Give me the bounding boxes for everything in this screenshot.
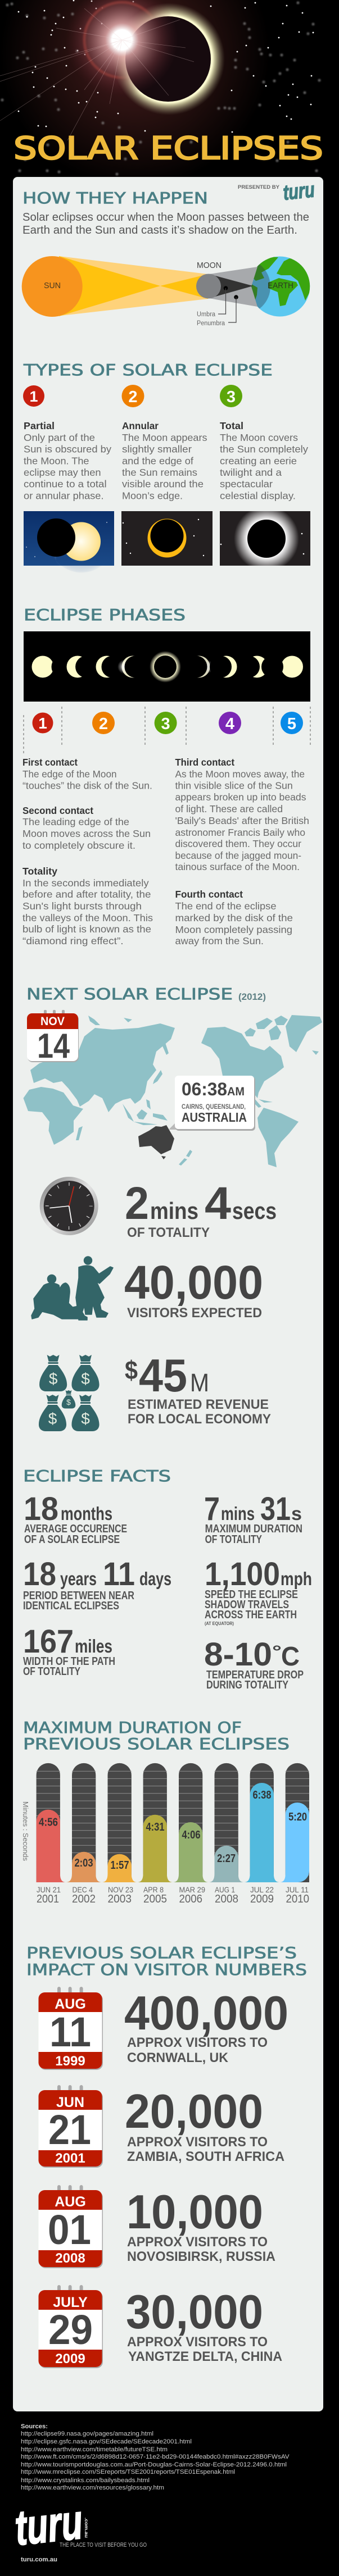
- diagram: sun moon earth: [22, 256, 310, 327]
- heading: next solar eclipse: (2012): [238, 991, 266, 1002]
- fact: 18 years 11 days: IDENTICAL ECLIPSES: [23, 1600, 119, 1612]
- fact: 8-10 degrees: DURING TOTALITY: [206, 1679, 289, 1691]
- umbra label: [197, 286, 228, 318]
- partial description: continue to a total: [24, 479, 107, 490]
- stat: revenue: ESTIMATED REVENUE: [128, 1397, 269, 1412]
- totality: [22, 866, 153, 946]
- fact: 8-10 degrees: [204, 1636, 304, 1691]
- fact: 1,100 mph: mph: [281, 1568, 312, 1589]
- icon: visitors silhouette: [31, 1257, 113, 1320]
- fact: 7 mins 31 s: mins: [221, 1503, 255, 1524]
- heading: next solar eclipse: NEXT SOLAR ECLIPSE: [26, 986, 233, 1003]
- stat: totality duration: 4: [205, 1178, 231, 1229]
- bar: Jul 2009: [244, 1783, 280, 1882]
- phase number badges: 3: [161, 715, 170, 733]
- fact: 1,100 mph: (AT EQUATOR): [205, 1621, 234, 1626]
- first contact: First contact: [22, 757, 78, 768]
- hero: eclipse over starfield: [0, 0, 339, 177]
- third contact: astronomer Francis Baily who: [175, 827, 305, 838]
- stat: 30,000 Yangtze: [126, 2286, 282, 2364]
- totality: bulb of light is known as the: [22, 923, 151, 935]
- fourth contact: away from the Sun.: [175, 935, 264, 946]
- heading: types of solar eclipse: TYPES OF SOLAR ECLIPSE: [23, 362, 273, 379]
- date labels: JUL 22: [250, 1885, 274, 1894]
- fact: 1,100 mph: SHADOW TRAVELS: [205, 1599, 289, 1611]
- total description: [220, 420, 308, 501]
- calendar: July 29 2009: [38, 2285, 103, 2368]
- fact: 8-10 degrees: TEMPERATURE DROP: [206, 1669, 304, 1681]
- fact: 167 miles: [23, 1623, 115, 1678]
- stat: 20,000 Zambia: [125, 2085, 284, 2164]
- stat: totality duration: mins: [150, 1198, 198, 1224]
- total description: spectacular: [220, 479, 273, 490]
- phase number badges: 5: [287, 715, 296, 733]
- world map: [24, 1015, 322, 1167]
- umbra label: Umbra: [197, 311, 216, 318]
- bar: Aug 2008: [209, 1846, 244, 1882]
- stat: 30,000 Yangtze: APPROX VISITORS TO: [127, 2334, 268, 2350]
- date labels: 2001: [37, 1893, 59, 1905]
- stat: totality duration: secs: [232, 1198, 277, 1224]
- fact: 18 years 11 days: PERIOD BETWEEN NEAR: [23, 1590, 134, 1602]
- totality: “diamond ring effect”.: [22, 935, 124, 946]
- stat: 10,000 Novosibirsk: NOVOSIBIRSK, RUSSIA: [127, 2249, 275, 2264]
- stat: 20,000 Zambia: 20,000: [125, 2085, 263, 2138]
- fact: 167 miles: OF TOTALITY: [23, 1665, 81, 1678]
- sources list: [21, 2423, 290, 2491]
- location callout: [169, 1076, 255, 1131]
- partial description: [24, 420, 111, 501]
- fact: 7 mins 31 s: [204, 1491, 302, 1546]
- presented by logo: PRESENTED BY: [238, 184, 280, 190]
- annular description: Annular: [122, 420, 159, 431]
- partial description: eclipse may then: [24, 467, 101, 478]
- location callout: 06:38: [182, 1079, 227, 1099]
- fact: 167 miles: 167: [23, 1623, 74, 1660]
- partial description: the Moon. The: [24, 455, 89, 466]
- number badge 3: 3: [227, 388, 236, 406]
- bar: Jun 2001: 4:56: [39, 1817, 58, 1829]
- calendar: Aug 11 1999: AUG: [55, 1996, 86, 2012]
- sources list: http://www.mreclipse.com/SEreports/TSE2001reports/TSE01Espenak.html: [21, 2469, 235, 2475]
- main panel: [13, 177, 323, 2411]
- fact: 18 months: 18: [24, 1491, 58, 1527]
- bar: Dec 2002: [66, 1852, 102, 1882]
- annular description: Moon’s edge.: [122, 490, 183, 501]
- stat: totality duration: 2: [125, 1178, 149, 1229]
- third contact: As the Moon moves away, the: [175, 768, 305, 780]
- bar: Jul 2010: 5:20: [288, 1811, 307, 1823]
- annular description: and the edge of: [122, 455, 193, 466]
- icon: money bags: [39, 1355, 100, 1431]
- date calendar: Nov 14: NOV: [40, 1015, 65, 1028]
- fact: 1,100 mph: [205, 1556, 312, 1626]
- footer logo: .com.au: [84, 2518, 89, 2538]
- calendar: Jun 21 2001: [38, 2085, 103, 2168]
- heading: maximum duration: PREVIOUS SOLAR ECLIPSES: [23, 1736, 290, 1753]
- bar: Jul 2009: 6:38: [253, 1789, 271, 1801]
- date labels: 2002: [72, 1893, 96, 1905]
- stat: visitors: VISITORS EXPECTED: [127, 1305, 262, 1321]
- stat: 10,000 Novosibirsk: APPROX VISITORS TO: [127, 2234, 268, 2250]
- bar: Nov 2003: 1:57: [110, 1859, 129, 1872]
- fact: 167 miles: WIDTH OF THE PATH: [23, 1655, 115, 1668]
- penumbra label: [197, 295, 238, 327]
- bar: Mar 2006: [173, 1822, 209, 1882]
- third contact: because of the jagged moun-: [175, 850, 301, 861]
- calendar: Aug 01 2008: 2008: [55, 2251, 85, 2266]
- lens flare ring: [84, 2, 160, 78]
- date labels: 2009: [250, 1893, 274, 1905]
- fourth contact: Fourth contact: [175, 889, 243, 900]
- heading: visitor impact: [26, 1945, 307, 1979]
- second contact: Moon moves across the Sun: [22, 828, 151, 839]
- stat: totality duration: [125, 1178, 277, 1240]
- total description: celestial display.: [220, 490, 296, 501]
- date labels: APR 8: [143, 1885, 164, 1894]
- date labels: 2006: [179, 1893, 202, 1905]
- annular description: [122, 420, 207, 501]
- light cone: [56, 256, 208, 316]
- moon: [196, 261, 222, 299]
- fact: 7 mins 31 s: 31: [260, 1491, 291, 1527]
- fact: 18 years 11 days: 18: [23, 1556, 56, 1592]
- bar: Nov 2003: [102, 1854, 137, 1882]
- calendar: Jun 21 2001: JUN: [56, 2095, 84, 2110]
- calendar: July 29 2009: 2009: [55, 2351, 85, 2366]
- continents: [24, 1015, 322, 1167]
- totality: before and after totality, the: [22, 889, 151, 900]
- stat: revenue: FOR LOCAL ECONOMY: [128, 1412, 271, 1427]
- calendar: Jun 21 2001: 2001: [55, 2151, 85, 2166]
- stat: revenue: $: [125, 1355, 138, 1385]
- corona ring: [112, 3, 225, 115]
- fourth contact: [175, 889, 293, 946]
- background stars: [2, 1, 319, 174]
- website: turu.com.au: [21, 2556, 57, 2563]
- intro text: Solar eclipses occur when the Moon passes between the: [22, 211, 309, 224]
- bar chart: eclipse durations: [21, 1763, 309, 1905]
- fourth contact: Moon completely passing: [175, 924, 292, 935]
- fact: 18 months: OF A SOLAR ECLIPSE: [24, 1533, 120, 1546]
- bar: Apr 2005: [137, 1815, 173, 1882]
- sources list: http://eclipse.gsfc.nasa.gov/SEdecade/SEdecade2001.html: [21, 2438, 192, 2445]
- moon disc: [125, 16, 211, 102]
- stat: 400,000 Cornwall: CORNWALL, UK: [127, 2050, 229, 2065]
- heading: next solar eclipse: [26, 986, 266, 1003]
- third contact: Third contact: [175, 757, 234, 768]
- moon: MOON: [197, 261, 222, 270]
- number badge 1: 1: [29, 388, 38, 405]
- date labels: 2010: [286, 1893, 309, 1905]
- type 3: total: [220, 385, 310, 566]
- footer logo: THE PLACE TO VISIT BEFORE YOU GO: [60, 2542, 147, 2548]
- bar: Jul 2010: [280, 1803, 309, 1882]
- location callout: CAIRNS, QUEENSLAND,: [182, 1103, 246, 1110]
- sources list: http://eclipse99.nasa.gov/pages/amazing.html: [21, 2431, 153, 2437]
- bar tracks: [37, 1763, 309, 1882]
- penumbra shadow: [209, 267, 257, 307]
- date labels: 2008: [215, 1893, 238, 1905]
- third contact: discovered them. They occur: [175, 838, 301, 849]
- total description: Total: [220, 420, 243, 431]
- heading: visitor impact: PREVIOUS SOLAR ECLIPSE’S: [26, 1945, 297, 1962]
- intro text: Earth and the Sun and casts it’s shadow on the Earth.: [22, 224, 297, 236]
- heading: visitor impact: IMPACT ON VISITOR NUMBERS: [26, 1961, 307, 1979]
- fact: 18 years 11 days: years: [60, 1568, 97, 1589]
- calendar: Aug 01 2008: AUG: [55, 2194, 86, 2210]
- annular description: visible around the: [122, 479, 204, 490]
- stat: visitors: 40,000: [124, 1256, 263, 1309]
- phase number badges: 4: [225, 715, 234, 733]
- heading: eclipse phases: ECLIPSE PHASES: [24, 607, 186, 624]
- penumbra label: Penumbra: [197, 320, 225, 327]
- axis label: Minutes : Seconds: [21, 1801, 29, 1861]
- umbra shadow: [209, 274, 253, 298]
- second contact: to completely obscure it.: [22, 840, 135, 851]
- partial image: [24, 511, 114, 573]
- date labels: DEC 4: [72, 1885, 93, 1894]
- total description: The Moon covers: [220, 432, 298, 443]
- sources list: http://www.earthview.com/resources/glossary.htm: [21, 2484, 164, 2491]
- location callout: AM: [227, 1085, 245, 1098]
- fact: 1,100 mph: SPEED THE ECLIPSE: [205, 1589, 298, 1601]
- fact: 167 miles: miles: [75, 1636, 112, 1656]
- fact: 7 mins 31 s: 7: [204, 1491, 220, 1527]
- third contact: appears broken up into beads: [175, 791, 306, 803]
- total description: the Sun completely: [220, 444, 308, 455]
- fact: 18 years 11 days: days: [139, 1568, 171, 1589]
- heading: how they happen: HOW THEY HAPPEN: [22, 190, 208, 207]
- icon: money bags: $: [49, 1370, 58, 1387]
- partial description: or annular phase.: [24, 490, 104, 501]
- date labels: [37, 1885, 309, 1905]
- bar: Jun 2001: [37, 1810, 66, 1882]
- totality: Sun's light bursts through: [22, 900, 142, 912]
- total description: creating an eerie: [220, 455, 297, 466]
- stat: 400,000 Cornwall: [124, 1987, 288, 2065]
- phases strip: [24, 631, 310, 702]
- stat: 20,000 Zambia: APPROX VISITORS TO: [127, 2134, 268, 2150]
- australia highlighted: [138, 1125, 174, 1159]
- date labels: NOV 23: [108, 1885, 133, 1894]
- sources list: http://www.crystalinks.com/bailysbeads.html: [21, 2477, 150, 2484]
- calendar: Aug 01 2008: [38, 2185, 103, 2268]
- partial description: Partial: [24, 420, 55, 431]
- stat: 400,000 Cornwall: 400,000: [124, 1987, 288, 2040]
- fact: 18 months: months: [61, 1503, 112, 1524]
- annular image: [121, 511, 213, 566]
- stat: revenue: 45: [139, 1349, 187, 1401]
- earth: [251, 256, 310, 317]
- fact: 18 months: AVERAGE OCCURENCE: [24, 1523, 127, 1535]
- calendar: July 29 2009: JULY: [53, 2295, 88, 2310]
- second contact: [22, 805, 151, 851]
- icon: money bags: $: [66, 1398, 71, 1407]
- bar: Dec 2002: 2:03: [74, 1857, 93, 1869]
- stat: 30,000 Yangtze: YANGTZE DELTA, CHINA: [128, 2349, 282, 2364]
- partial description: Sun is obscured by: [24, 444, 111, 455]
- total description: twilight and a: [220, 467, 282, 478]
- fact: 8-10 degrees: 8-10: [204, 1636, 272, 1673]
- presented by logo: [238, 178, 316, 205]
- title: SOLAR ECLIPSES: [13, 130, 323, 166]
- first contact: “touches” the disk of the Sun.: [22, 780, 152, 791]
- stat: revenue: M: [190, 1368, 209, 1397]
- phase number badges: 2: [99, 715, 108, 733]
- bar: Mar 2006: 4:06: [182, 1829, 200, 1841]
- bar: Aug 2008: 2:27: [217, 1853, 236, 1865]
- totality: Totality: [22, 866, 57, 877]
- second contact: The leading edge of the: [22, 816, 129, 827]
- date calendar: Nov 14: [27, 1010, 79, 1066]
- heading: maximum duration: [23, 1719, 290, 1753]
- fact: 18 months: [24, 1491, 127, 1546]
- fact: 8-10 degrees: °: [272, 1642, 282, 1661]
- calendar: Jun 21 2001: 21: [48, 2106, 91, 2153]
- third contact: thin visible slice of the Sun: [175, 780, 293, 791]
- fact: 1,100 mph: ACROSS THE EARTH: [205, 1609, 297, 1621]
- stat: 400,000 Cornwall: APPROX VISITORS TO: [127, 2035, 268, 2050]
- calendar: Aug 01 2008: 01: [48, 2206, 91, 2253]
- sources list: http://www.ft.com/cms/s/2/d6898d12-0657-11e2-bd29-00144feabdc0.html#axzz28B0FWsAV: [21, 2454, 290, 2460]
- phase dividers: [24, 707, 310, 754]
- date labels: JUL 11: [286, 1885, 309, 1894]
- earth: EARTH: [268, 281, 293, 290]
- intro text: [22, 211, 309, 236]
- date calendar: Nov 14: 14: [37, 1027, 70, 1066]
- icon: money bags: $: [81, 1370, 90, 1387]
- calendar: July 29 2009: 29: [48, 2306, 93, 2353]
- icon: money bags: $: [81, 1410, 90, 1427]
- fact: 7 mins 31 s: s: [291, 1503, 302, 1524]
- date labels: 2005: [143, 1893, 167, 1905]
- stat: 10,000 Novosibirsk: 10,000: [126, 2186, 263, 2239]
- totality: In the seconds immediately: [22, 877, 149, 889]
- fact: 8-10 degrees: C: [281, 1642, 300, 1672]
- number badge 1: [23, 385, 44, 407]
- third contact: 'Baily's Beads' after the British: [175, 815, 309, 826]
- heading: eclipse facts: ECLIPSE FACTS: [23, 1468, 171, 1485]
- fact: 7 mins 31 s: MAXIMUM DURATION: [205, 1523, 302, 1535]
- track grid lines: [48, 1771, 297, 1879]
- type 2: annular: [121, 385, 213, 566]
- light rays: [0, 8, 194, 140]
- total image: [220, 511, 310, 566]
- diamond ring glow: [66, 0, 178, 96]
- totality: the valleys of the Moon. This: [22, 912, 153, 923]
- stat: 10,000 Novosibirsk: [126, 2186, 275, 2264]
- number badge 3: [220, 385, 242, 407]
- fact: 7 mins 31 s: OF TOTALITY: [205, 1533, 263, 1546]
- number badge 2: [121, 385, 144, 407]
- date labels: MAR 29: [179, 1885, 205, 1894]
- fact: 18 years 11 days: 11: [103, 1556, 135, 1592]
- footer logo: turu: [12, 2493, 85, 2556]
- presented by logo: turu: [282, 178, 316, 205]
- calendar: Aug 11 1999: 11: [49, 2009, 91, 2055]
- type 1: partial: [23, 385, 114, 573]
- first contact: The edge of the Moon: [22, 768, 117, 780]
- annular description: slightly smaller: [122, 444, 192, 455]
- bar: Apr 2005: 4:31: [146, 1821, 164, 1833]
- partial description: Only part of the: [24, 432, 95, 443]
- sources list: http://www.tourismportdouglas.com.au/Port-Douglas-Cairns-Solar-Eclipse-2012.2496.0.html: [21, 2461, 287, 2468]
- sources list: Sources:: [21, 2423, 48, 2430]
- first contact: [22, 757, 152, 791]
- phase number badges: 1: [38, 714, 47, 732]
- fourth contact: marked by the disk of the: [175, 912, 293, 923]
- stat: totality duration: OF TOTALITY: [127, 1225, 210, 1240]
- sun: [22, 256, 83, 317]
- stat: 20,000 Zambia: ZAMBIA, SOUTH AFRICA: [127, 2149, 284, 2164]
- number badge 2: 2: [128, 388, 138, 406]
- icon: clock: [40, 1177, 98, 1235]
- sources list: http://www.earthview.com/timetable/futureTSE.htm: [21, 2446, 168, 2453]
- annular description: The Moon appears: [122, 432, 207, 443]
- fact: 18 years 11 days: [23, 1556, 171, 1612]
- location callout: AUSTRALIA: [182, 1110, 247, 1125]
- third contact: of light. These are called: [175, 803, 283, 814]
- annular description: the Sun remains: [122, 467, 197, 478]
- date labels: JUN 21: [37, 1885, 61, 1894]
- second contact: Second contact: [22, 805, 93, 816]
- phase sequence: [31, 651, 303, 682]
- third contact: [175, 757, 309, 872]
- date labels: 2003: [108, 1893, 132, 1905]
- calendar: Aug 11 1999: [38, 1987, 103, 2070]
- calendar: Aug 11 1999: 1999: [55, 2054, 85, 2069]
- fact: 1,100 mph: 1,100: [205, 1556, 280, 1592]
- stat: 30,000 Yangtze: 30,000: [126, 2286, 263, 2339]
- third contact: tainous surface of the Moon.: [175, 861, 300, 872]
- phase number badges: [33, 712, 303, 734]
- date labels: AUG 1: [215, 1885, 235, 1894]
- fourth contact: The end of the eclipse: [175, 900, 277, 912]
- sun: SUN: [44, 281, 61, 290]
- icon: money bags: $: [48, 1410, 57, 1427]
- heading: maximum duration: MAXIMUM DURATION OF: [23, 1719, 242, 1737]
- stat: revenue: [125, 1349, 271, 1427]
